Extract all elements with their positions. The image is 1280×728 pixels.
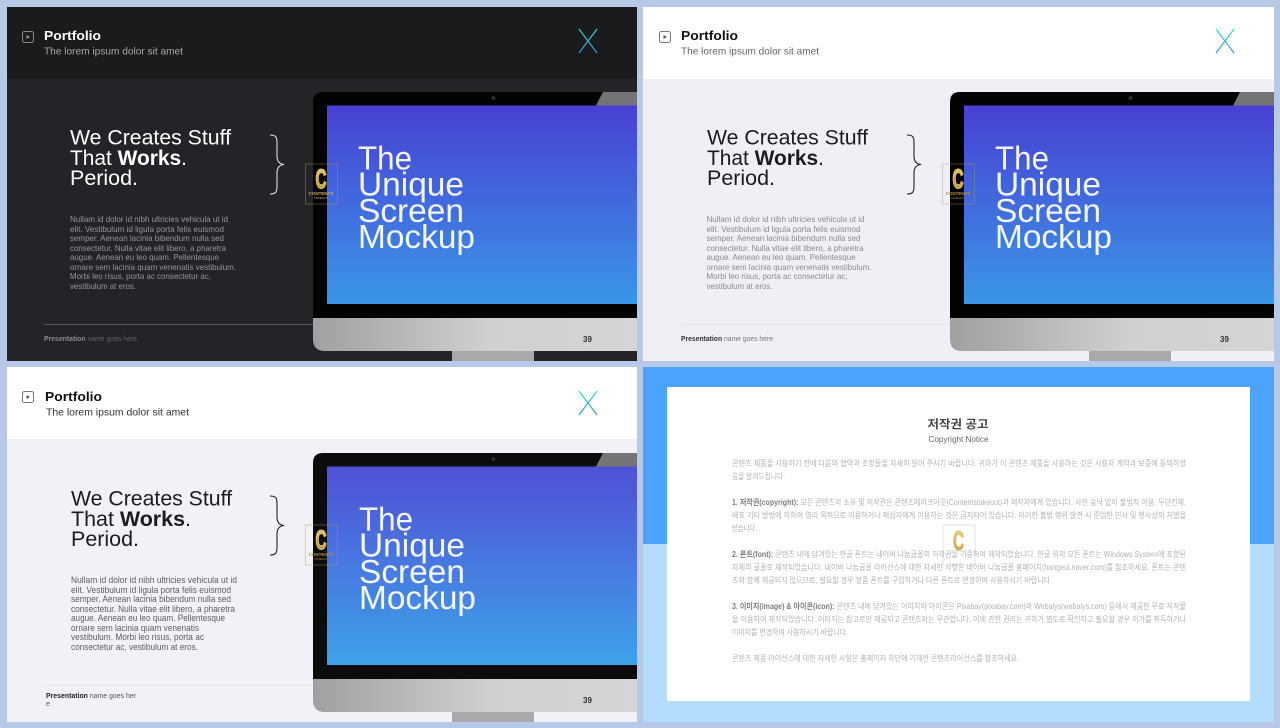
watermark: C [316, 525, 326, 555]
body text: Nullam id dolor id nibh ultricies vehicula ut id [70, 214, 228, 224]
body text: Nullam id dolor id nibh ultricies vehicula ut id [706, 214, 865, 224]
watermark: C [952, 164, 964, 194]
footer: Presentation name goes here [44, 336, 137, 343]
headline [70, 126, 231, 190]
panel: light slide [643, 7, 1274, 361]
body text: semper. Aenean lacinia bibendum nulla sed [70, 233, 224, 243]
body text: elit. Vestibulum id ligula porta felis euismod [71, 585, 231, 595]
headline: Period. [70, 167, 138, 190]
watermark: TAKEOUT [314, 557, 328, 561]
section 3: image and icon: 을 이용하여 제작되었습니다. 이미지는 참고로만 제공되고 콘텐츠와는 무관합니다. 이에 관한 권리는 귀하가 별도로 확인하고 필요할 경우 허가를 취득하거나 [732, 614, 1187, 624]
section 3: image and icon [732, 601, 1187, 637]
headline: Period. [71, 528, 139, 551]
section 3: image and icon: 이미지를 변경하여 사용하시기 바랍니다. [732, 627, 848, 637]
watermark [943, 525, 975, 565]
brace [270, 496, 284, 555]
screen headline: Mockup [358, 218, 475, 255]
intro paragraph: 음을 알려드립니다. [732, 471, 785, 481]
watermark: C [316, 164, 326, 194]
section 2: font: 2. 폰트(font): 콘텐츠 내에 담겨있는 한글 폰트는 네이버 나눔글꼴의 저작권을 기증하여 제작되었습니다. 한글 위의 모든 폰트는 Windows System에 포함된 [732, 549, 1186, 559]
watermark: C [953, 526, 964, 556]
section 2: font: 츠와 함께 제공되지 않으므로, 필요할 경우 정품 폰트를 구입하거나 다른 폰트로 변경하여 사용하시기 바랍니다. [732, 575, 1052, 585]
brace [907, 135, 921, 194]
section 1: copyright: 받습니다. [732, 523, 757, 533]
headline: Period. [707, 167, 775, 190]
screen headline: Unique [995, 166, 1101, 202]
header: dark [7, 7, 637, 79]
body text: semper. Aenean lacinia bibendum nulla sed [706, 233, 861, 243]
screen headline: Unique [358, 166, 464, 202]
body text: semper. Aenean lacinia bibendum nulla sed [71, 594, 231, 604]
footer: Presentation name goes her [46, 693, 137, 700]
body text: ornare sem lacinia quam venenatis [71, 623, 200, 633]
body text: vestibulum. Morbi leo risus, porta ac [71, 632, 205, 642]
monitor mockup [313, 453, 637, 722]
watermark: TAKEOUT [951, 196, 965, 200]
watermark [942, 164, 974, 204]
footer: e [46, 701, 50, 708]
intro paragraph: 콘텐츠 제품을 사용하기 전에 다음의 협약과 조항들을 자세히 읽어 주시기 바랍니다. 귀하가 이 콘텐츠 제품을 사용하는 것은 사용자 계약과 보증에 동의하셨 [732, 458, 1187, 468]
monitor mockup: 39 [583, 335, 592, 344]
body text: augue. Aenean eu leo quam. Pellentesque [70, 252, 219, 262]
monitor mockup: 39 [1220, 335, 1229, 344]
header: dark: The lorem ipsum dolor sit amet [44, 46, 183, 58]
body text: elit. Vestibulum id ligula porta felis euismod [706, 224, 861, 234]
headline: That Works. [707, 147, 824, 170]
screen headline [995, 140, 1112, 255]
section 3: image and icon: 3. 이미지(image) & 아이콘(icon): 콘텐츠 내에 담겨있는 이미지와 아이콘은 Pixabay(pixabay.com)와 Webalys(webalys.com) 등에서 제공한 무료 저작물 [732, 601, 1186, 611]
panel: dark slide [7, 7, 637, 361]
monitor mockup [950, 92, 1274, 361]
headline: That Works. [70, 147, 187, 170]
headline [707, 126, 868, 190]
screen headline: Unique [359, 526, 465, 564]
headline: We Creates Stuff [707, 126, 868, 150]
section 1: copyright: 1. 저작권(copyright): 모든 콘텐츠의 소유 및 저작권은 콘텐츠메이크아웃(Contentstakeout)과 제작자에게 있습니다. 사전 승낙 없이 불법적 이용, 무단전재, [732, 497, 1186, 507]
header: white [643, 7, 1274, 79]
footer [45, 686, 314, 708]
notice title: Copyright Notice [928, 434, 989, 444]
notice title [928, 417, 989, 444]
watermark: CONTENTS [309, 191, 333, 196]
header: white: Portfolio [45, 389, 102, 404]
header: white: Portfolio [681, 28, 738, 43]
body text: augue. Aenean eu leo quam. Pellentesque [71, 613, 225, 623]
header: white: The lorem ipsum dolor sit amet [46, 406, 189, 418]
body text: vestibulum at eros. [706, 281, 772, 291]
body text: ornare sem lacinia quam venenatis vestibulum. [70, 262, 236, 272]
screen headline [358, 140, 475, 255]
section 1: copyright: 배포 기타 방법에 의하여 영리 목적으로 이용하거나 제삼자에게 이용하는 것은 금지되어 있습니다. 이러한 불법 행위 발견 시 준엄한 민사 및 형사상의 처벌을 [732, 510, 1186, 520]
header: white: The lorem ipsum dolor sit amet [681, 46, 819, 58]
section 2: font [732, 549, 1186, 585]
panel: light slide variant [7, 367, 637, 722]
screen headline: Screen [359, 553, 465, 590]
body text: consectetur. Nulla vitae elit libero, a pharetra [706, 243, 864, 253]
footer: Presentation name goes here [681, 336, 773, 343]
body text [70, 214, 236, 291]
headline: That Works. [71, 508, 191, 531]
body text: vestibulum at eros. [70, 281, 136, 291]
headline: We Creates Stuff [71, 488, 232, 510]
monitor mockup: 39 [583, 696, 592, 705]
brace [270, 135, 284, 194]
body text: ornare sem lacinia quam venenatis vestibulum. [706, 262, 872, 272]
body text: augue. Aenean eu leo quam. Pellentesque [706, 252, 856, 262]
headline: We Creates Stuff [70, 126, 231, 150]
panel: copyright notice [643, 367, 1274, 722]
body text: consectetur ac, vestibulum at eros. [71, 642, 198, 652]
header: dark: Portfolio [44, 28, 101, 43]
monitor mockup [313, 92, 637, 361]
screen headline: Screen [995, 192, 1101, 229]
screen headline: Mockup [995, 218, 1112, 255]
notice title: 저작권 공고 [928, 417, 989, 431]
watermark [306, 525, 338, 565]
intro paragraph [732, 458, 1187, 481]
body text: elit. Vestibulum id ligula porta felis euismod [70, 224, 224, 234]
screen headline: The [995, 140, 1049, 176]
body text [706, 214, 872, 291]
section 2: font: 자체의 글꼴로 제작되었습니다. 네이버 나눔글꼴 라이선스에 대한 자세한 사항은 네이버 나눔글꼴 홈페이지(hangeul.naver.com)를 참조하세요. 폰트는 콘텐 [732, 562, 1186, 572]
screen headline: Mockup [359, 579, 476, 616]
headline [71, 488, 232, 551]
body text: Morbi leo risus, porta ac consectetur ac, [70, 271, 211, 281]
screen headline: The [358, 140, 412, 176]
watermark [306, 164, 338, 204]
body text: Nullam id dolor id nibh ultricies vehicula ut id [71, 575, 237, 585]
screen headline: Screen [358, 192, 464, 229]
body text [71, 575, 237, 652]
body text: consectetur. Nulla vitae elit libero, a pharetra [71, 604, 235, 614]
body text: Morbi leo risus, porta ac consectetur ac, [706, 271, 848, 281]
screen headline: The [359, 500, 413, 538]
header: white [7, 367, 637, 439]
watermark: CONTENTS [309, 552, 333, 557]
screen headline [359, 500, 476, 616]
notice card [667, 387, 1250, 701]
closing line: 콘텐츠 제품 라이선스에 대한 자세한 사항은 홈페이지 하단에 기재한 콘텐츠라이선스를 참조하세요. [732, 653, 1019, 663]
section 1: copyright [732, 497, 1186, 533]
body text: consectetur. Nulla vitae elit libero, a pharetra [70, 243, 226, 253]
watermark: CONTENTS [946, 191, 970, 196]
watermark: TAKEOUT [314, 196, 328, 200]
